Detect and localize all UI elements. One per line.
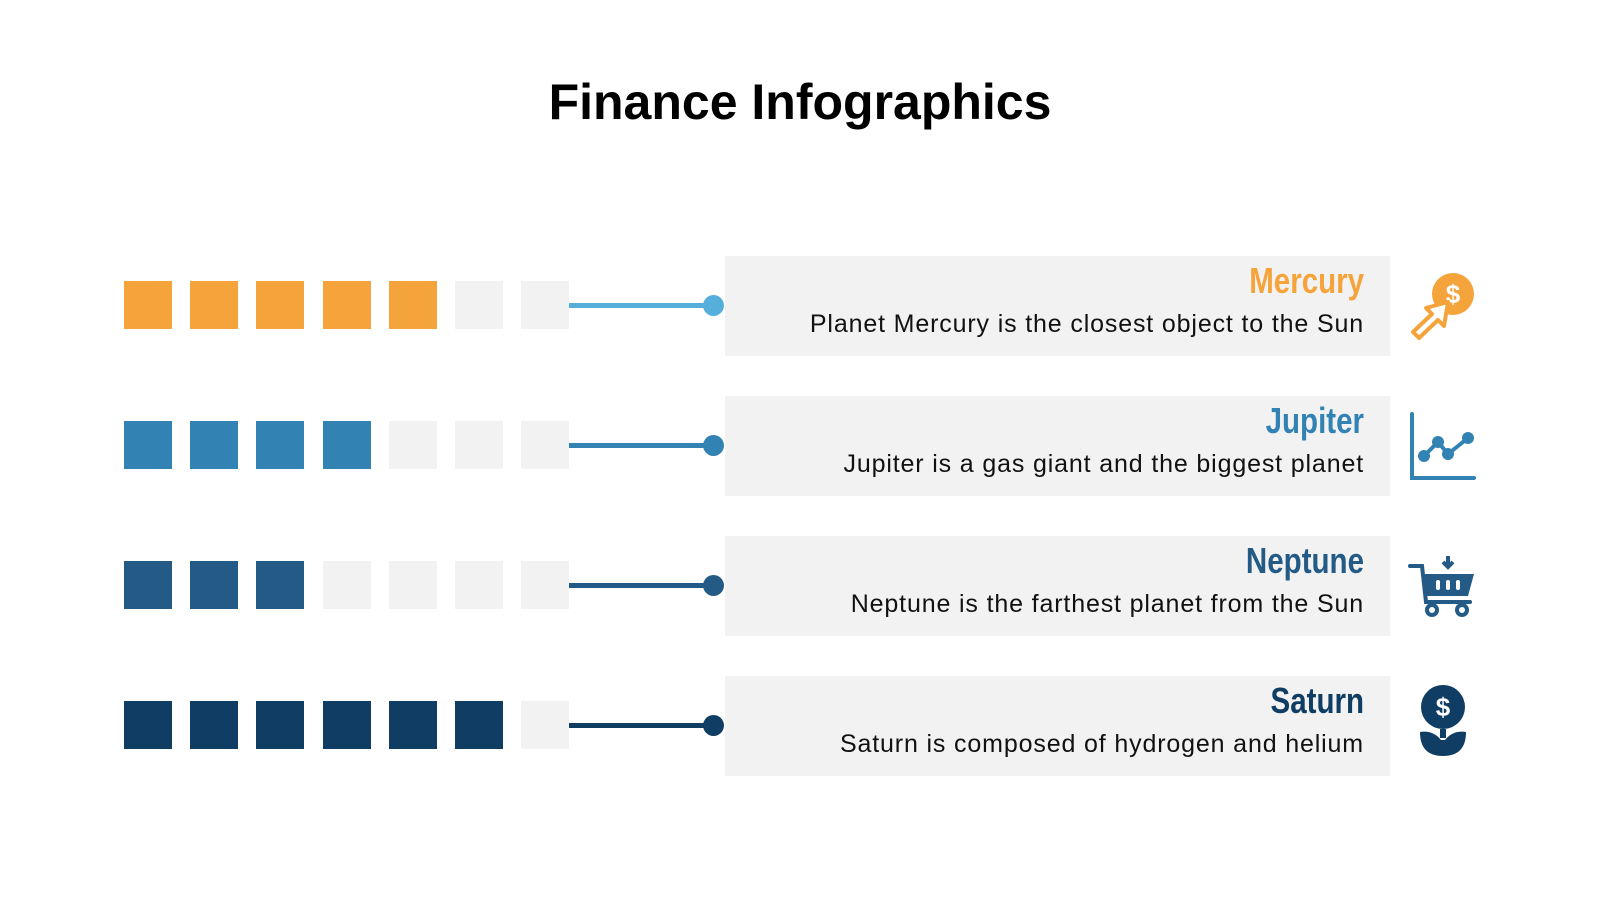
panel: Mercury <box>725 256 1390 356</box>
panel: Jupiter: Jupiter is a gas giant and the biggest planet <box>843 450 1364 478</box>
connector <box>569 435 724 456</box>
connector <box>569 575 724 596</box>
panel: Saturn: Saturn is composed of hydrogen and helium <box>840 730 1364 758</box>
squares: Mercury <box>124 281 569 329</box>
icon: click dollar <box>1410 273 1474 340</box>
row: Mercury <box>124 256 1474 356</box>
icon: line chart <box>1410 412 1476 480</box>
title: Finance Infographics <box>549 74 1051 130</box>
icon: click dollar: $ <box>1446 279 1461 309</box>
panel: Jupiter: Jupiter <box>1266 400 1364 441</box>
squares: Jupiter <box>124 421 569 469</box>
panel: Neptune: Neptune <box>1246 540 1364 581</box>
connector <box>569 715 724 736</box>
icon: money plant: $ <box>1436 692 1451 722</box>
panel: Mercury: Planet Mercury is the closest object to the Sun <box>810 310 1364 338</box>
icon: money plant <box>1420 685 1466 756</box>
panel: Neptune <box>725 536 1390 636</box>
row: Saturn <box>124 676 1466 776</box>
panel: Saturn <box>725 676 1390 776</box>
panel: Neptune: Neptune is the farthest planet from the Sun <box>851 590 1364 618</box>
panel: Jupiter <box>725 396 1390 496</box>
squares: Neptune <box>124 561 569 609</box>
row: Neptune <box>124 536 1474 636</box>
panel: Mercury: Mercury <box>1249 260 1364 301</box>
icon: cart <box>1408 556 1474 617</box>
row: Jupiter <box>124 396 1476 496</box>
squares: Saturn <box>124 701 569 749</box>
connector <box>569 295 724 316</box>
panel: Saturn: Saturn <box>1271 680 1364 721</box>
